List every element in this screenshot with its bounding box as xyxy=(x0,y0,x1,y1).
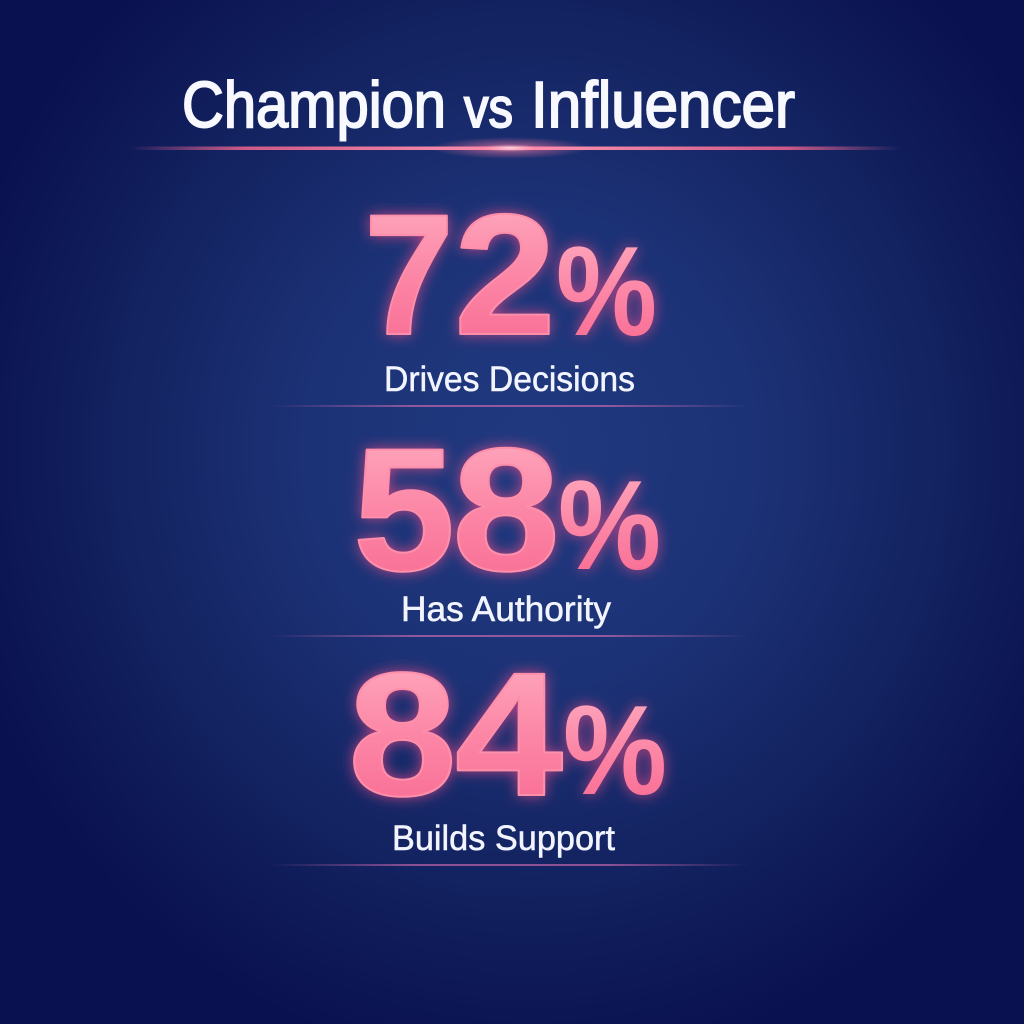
divider xyxy=(270,635,750,637)
title: Champion xyxy=(182,68,446,141)
stat: 58% xyxy=(353,413,661,608)
divider xyxy=(270,864,750,866)
title xyxy=(182,68,795,141)
label: Has Authority: Has Authority xyxy=(401,590,612,629)
label: Drives Decisions: Drives Decisions xyxy=(384,360,635,399)
stat: 84%: 4 xyxy=(455,637,563,833)
stat: 58%: 5 xyxy=(353,413,455,608)
stat: 72% xyxy=(364,179,657,371)
stat: 58%: % xyxy=(558,454,661,596)
divider xyxy=(270,405,750,407)
label: Builds Support: Builds Support xyxy=(392,819,615,858)
title: Influencer xyxy=(531,68,795,141)
title underline xyxy=(130,137,900,159)
stat: 84%: 8 xyxy=(348,637,457,833)
stat: 84%: % xyxy=(563,679,667,821)
stat: 72%: % xyxy=(556,220,657,362)
stat: 72%: 7 xyxy=(364,179,454,371)
stat: 58%: 8 xyxy=(452,413,560,608)
stat: 84% xyxy=(348,637,667,833)
title: vs xyxy=(464,76,513,139)
stat: 72%: 2 xyxy=(454,179,556,371)
